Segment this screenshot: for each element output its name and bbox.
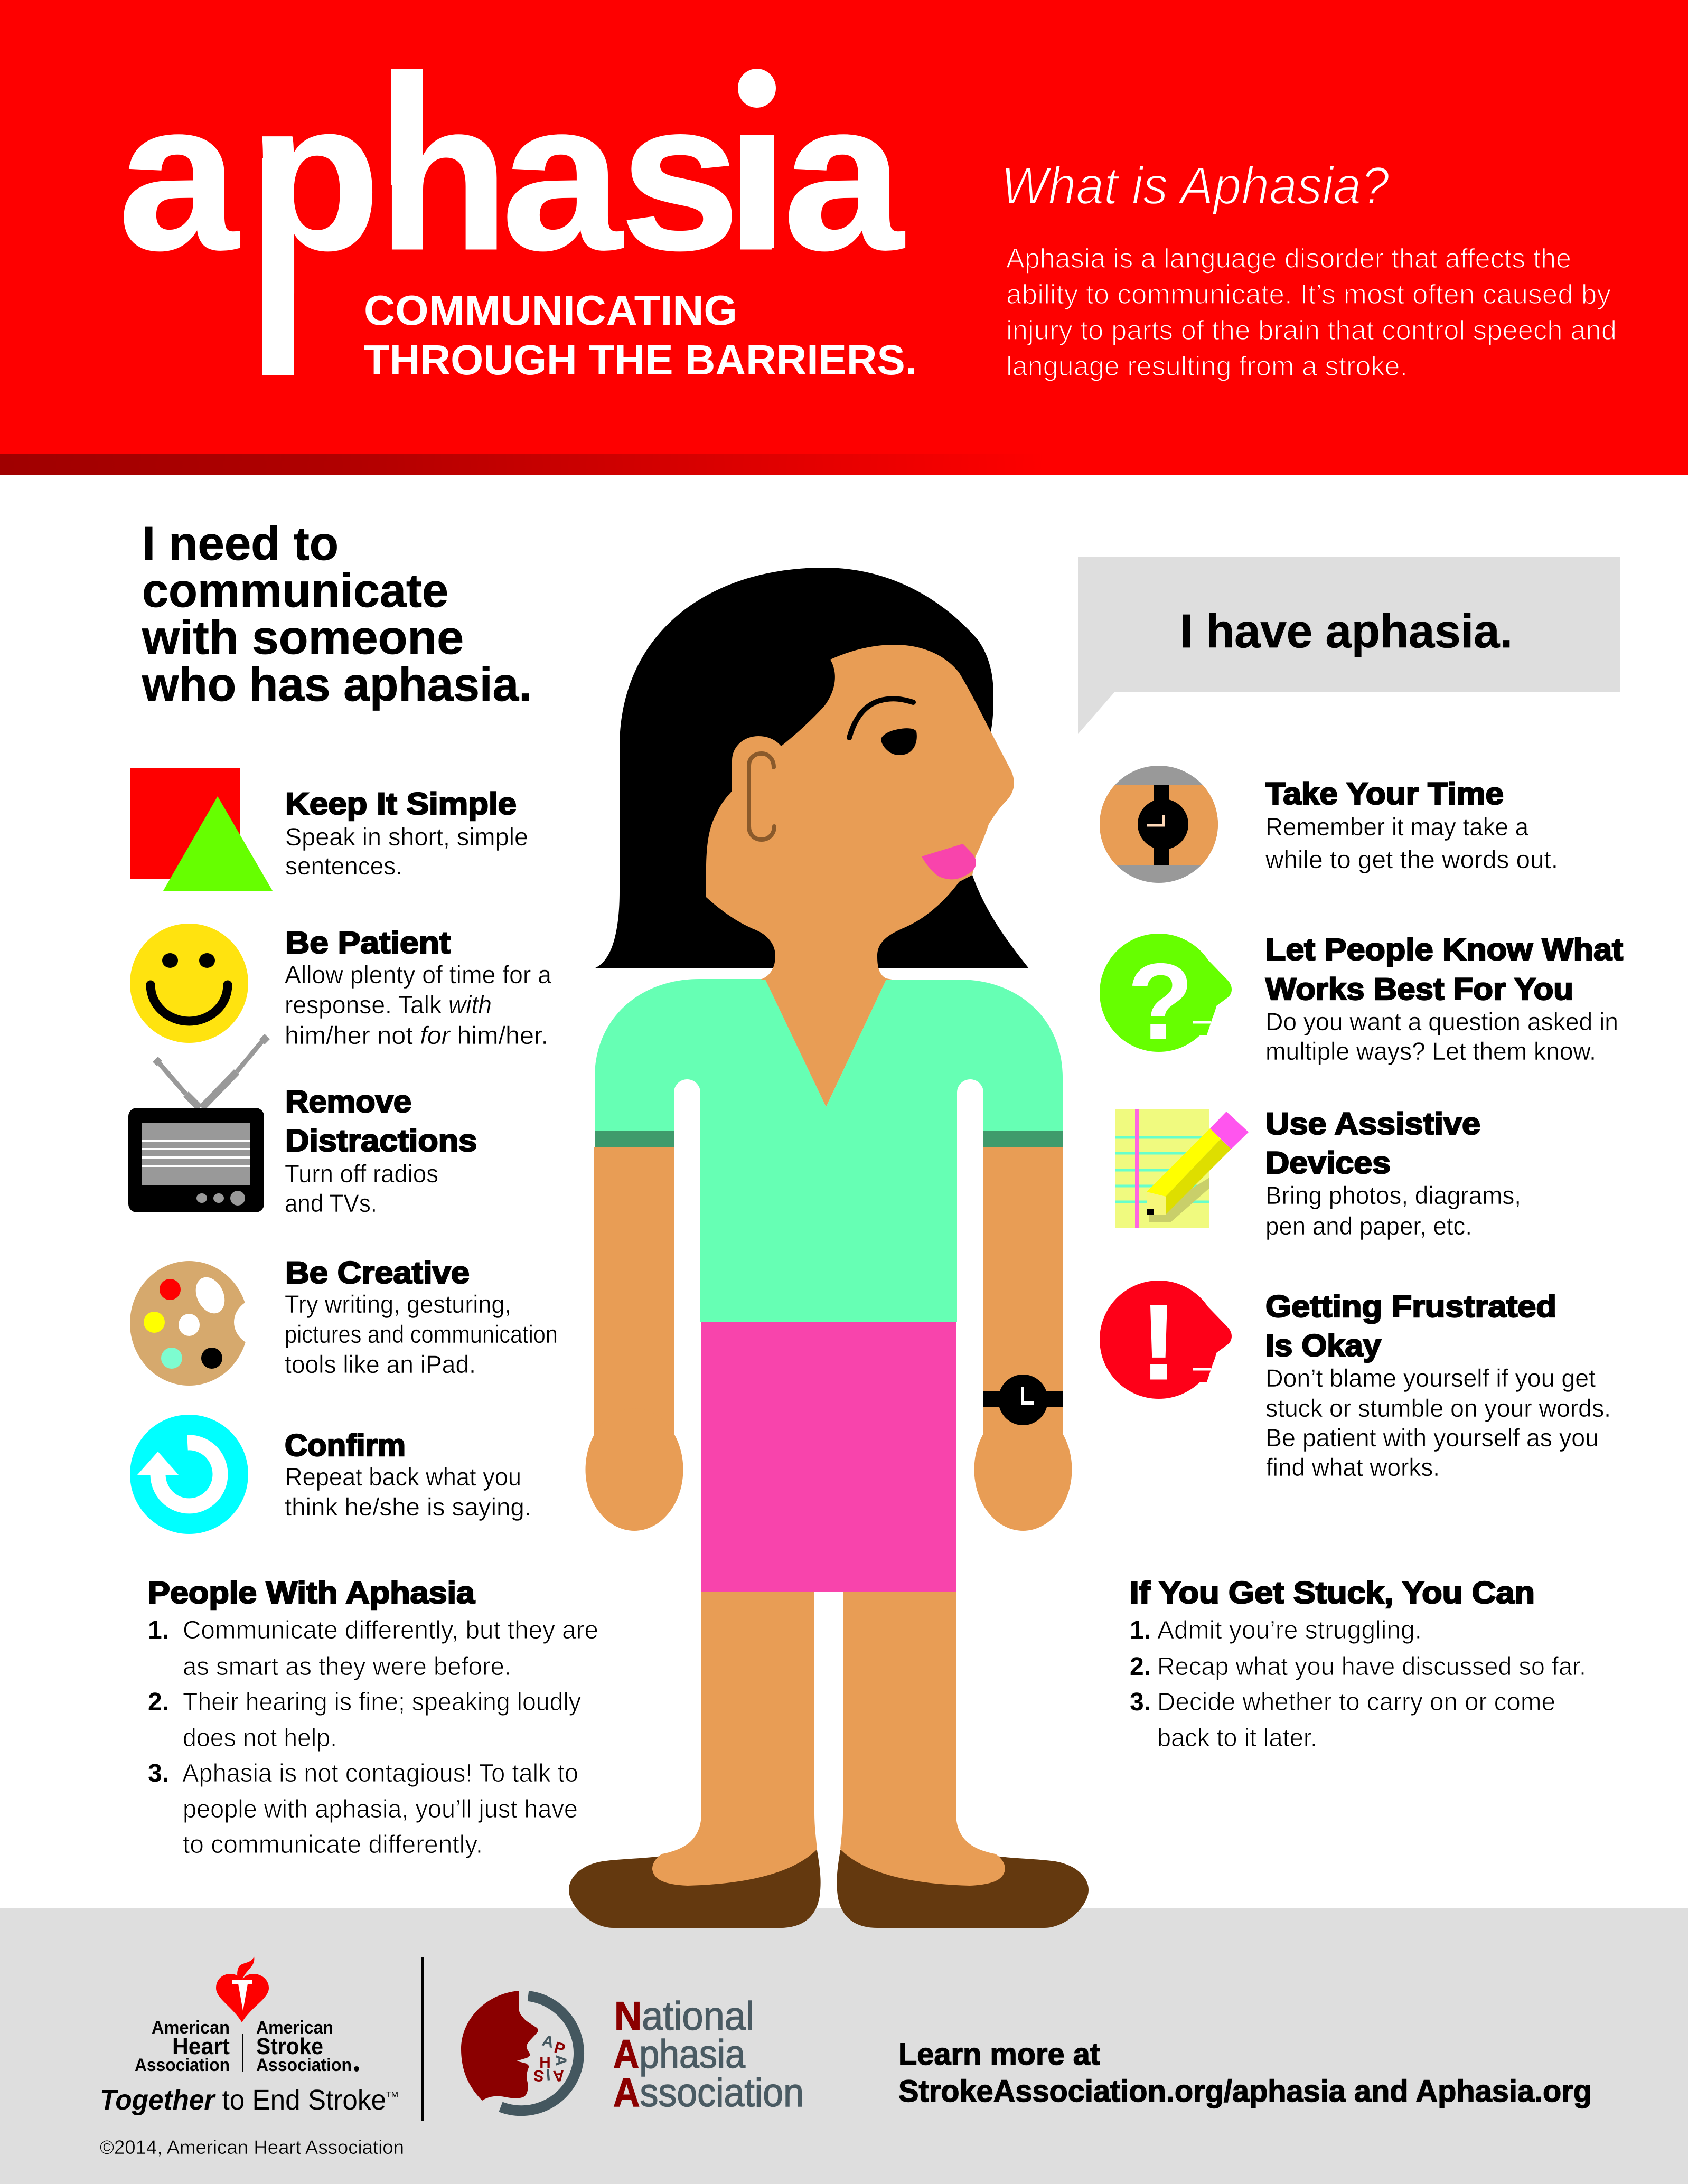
text block: definition: Aphasia is a language disorder that affects the <box>1006 243 1571 274</box>
icon: television <box>128 1037 267 1212</box>
skirt <box>701 1322 956 1592</box>
panel: tip getting frustrated <box>1100 1281 1611 1481</box>
text: getting frustrated <box>1265 1289 1611 1481</box>
sleeve cuffs <box>595 1131 1063 1147</box>
text: getting frustrated: Is Okay <box>1265 1329 1381 1363</box>
text: organisation name <box>613 1994 804 2115</box>
text: keep it simple: sentences. <box>285 852 402 880</box>
face and neck <box>706 645 1014 1107</box>
list: if you get stuck: 1. <box>1130 1616 1151 1644</box>
text: association names: Association <box>256 2055 352 2075</box>
text: keep it simple: Keep It Simple <box>285 787 517 821</box>
list: people with aphasia: people with aphasia, you’ll just have <box>183 1795 578 1823</box>
text: take your time <box>1265 777 1558 873</box>
icon: notepad and pencil <box>1115 1109 1249 1228</box>
text: confirm: Confirm <box>285 1428 406 1463</box>
text block: definition <box>1006 243 1617 382</box>
icon: exclamation head: ! <box>1141 1284 1176 1401</box>
list: people with aphasia: 1. <box>148 1616 169 1644</box>
text: keep it simple <box>285 787 528 880</box>
logo: American Heart and Stroke Association <box>100 1956 386 2116</box>
icon: exclamation head <box>1100 1281 1232 1401</box>
text: use assistive devices: Use Assistive <box>1265 1107 1480 1141</box>
text: confirm <box>285 1428 531 1521</box>
list: if you get stuck: back to it later. <box>1157 1724 1317 1752</box>
ear <box>749 754 774 840</box>
hair <box>594 568 1029 968</box>
right foot and shoe <box>837 1813 1089 1928</box>
text: let people know <box>1265 933 1623 1065</box>
icon: smiley <box>130 924 248 1043</box>
text: getting frustrated: Be patient with yourself as you <box>1265 1424 1599 1452</box>
heading: if you get stuck: If You Get Stuck, You Can <box>1130 1576 1535 1610</box>
icon: watch <box>1099 766 1219 883</box>
panel: if you get stuck <box>1130 1576 1586 1752</box>
heading: I need to communicate <box>142 517 532 711</box>
icon: face profile and ring: P <box>552 2039 567 2058</box>
icon: face profile and ring: H <box>539 2054 551 2072</box>
text: organisation name: Aphasia <box>613 2032 746 2077</box>
text: keep it simple: Speak in short, simple <box>285 823 528 851</box>
text: getting frustrated: find what works. <box>1266 1453 1440 1481</box>
icon: heart and torch <box>216 1956 269 2022</box>
text block: definition: language resulting from a stroke. <box>1006 351 1408 382</box>
text: organisation name: National <box>614 1994 754 2039</box>
text: learn more <box>898 2037 1592 2108</box>
text: be patient: Be Patient <box>285 926 451 960</box>
list: people with aphasia: to communicate differently. <box>183 1831 483 1859</box>
panel: tip be patient <box>130 924 552 1049</box>
text: let people know: Works Best For You <box>1265 972 1573 1006</box>
text: be creative <box>285 1256 558 1378</box>
text block: definition: injury to parts of the brain that control speech and <box>1006 315 1617 346</box>
list: people with aphasia: does not help. <box>183 1724 337 1752</box>
panel: tip keep it simple <box>130 768 528 891</box>
text: take your time: Take Your Time <box>1265 777 1504 811</box>
text: use assistive devices: pen and paper, etc. <box>1265 1212 1472 1240</box>
subtitle <box>364 287 917 383</box>
text: be creative: pictures and communication <box>285 1320 558 1348</box>
text: getting frustrated: stuck or stumble on your words. <box>1265 1394 1611 1422</box>
icon: palette <box>130 1261 294 1386</box>
text: be creative: Be Creative <box>285 1256 470 1290</box>
text: association names: Stroke <box>256 2034 323 2059</box>
speech bubble: I have aphasia <box>1078 557 1620 734</box>
text: use assistive devices: Bring photos, diagrams, <box>1265 1181 1521 1209</box>
icon: face profile and ring <box>461 1991 579 2111</box>
text: be patient: him/her not for him/her. <box>285 1021 548 1049</box>
icon: face profile and ring: I <box>545 2066 551 2083</box>
heading: I need to communicate: with someone <box>142 611 464 664</box>
text: remove distractions: Remove <box>285 1085 411 1119</box>
text: getting frustrated: Getting Frustrated <box>1265 1289 1556 1324</box>
text: be patient <box>285 926 552 1049</box>
heading: I need to communicate: communicate <box>142 564 448 617</box>
panel: tip let people know <box>1100 933 1623 1065</box>
wristwatch <box>983 1375 1063 1425</box>
text: be creative: Try writing, gesturing, <box>285 1290 511 1318</box>
speech bubble: I have aphasia: I have aphasia. <box>1180 605 1513 658</box>
icon: face profile and ring: S <box>533 2066 545 2085</box>
left arm and hand <box>585 1147 683 1531</box>
text: remove distractions: Turn off radios <box>285 1160 438 1188</box>
legs <box>701 1592 956 1814</box>
list: people with aphasia: Communicate differently, but they are <box>183 1616 598 1644</box>
text: be patient: Allow plenty of time for a <box>285 961 552 989</box>
tagline: together to end stroke: Together to End Stroke <box>100 2084 386 2116</box>
heading: people with aphasia: People With Aphasia <box>148 1576 475 1610</box>
text: confirm: think he/she is saying. <box>285 1493 531 1521</box>
icon: question head: ? <box>1127 941 1194 1062</box>
list: if you get stuck: 3. <box>1130 1688 1151 1716</box>
eyebrow <box>849 699 913 738</box>
list: people with aphasia: Aphasia is not contagious! To talk to <box>182 1759 578 1787</box>
text block: definition: ability to communicate. It’s most often caused by <box>1006 279 1611 310</box>
icon: question head <box>1100 934 1232 1062</box>
figure: woman with aphasia <box>569 568 1089 1928</box>
heading: I need to communicate: who has aphasia. <box>142 658 532 711</box>
list: if you get stuck: Decide whether to carry on or come <box>1157 1688 1555 1716</box>
panel: people with aphasia <box>148 1576 598 1859</box>
divider between logos <box>421 1957 424 2121</box>
text: learn more: Learn more at <box>898 2037 1100 2072</box>
copyright: ©2014, American Heart Association <box>100 2136 404 2158</box>
text: getting frustrated: Don’t blame yourself if you get <box>1265 1364 1596 1392</box>
subtitle: THROUGH THE BARRIERS. <box>364 336 917 383</box>
icon: face profile and ring: A <box>540 2032 556 2051</box>
icon: circular arrow <box>130 1415 248 1534</box>
lips <box>922 844 976 879</box>
icon: face profile and ring: A <box>552 2066 565 2085</box>
text: be creative: tools like an iPad. <box>285 1350 476 1378</box>
text: organisation name: Association <box>613 2070 804 2115</box>
text: let people know: multiple ways? Let them know. <box>1265 1037 1596 1065</box>
shirt <box>595 979 1063 1322</box>
left foot and shoe <box>569 1813 821 1928</box>
panel: tip be creative <box>130 1256 558 1386</box>
panel: red header <box>0 0 1688 475</box>
list: people with aphasia: 2. <box>148 1688 169 1716</box>
panel: tip remove distractions <box>128 1037 477 1217</box>
text: association names: American <box>256 2018 333 2038</box>
panel: tip confirm <box>130 1415 531 1534</box>
text: association names <box>135 2018 359 2075</box>
text: remove distractions: Distractions <box>285 1124 477 1158</box>
text: confirm: Repeat back what you <box>285 1463 521 1491</box>
trademark mark: TM <box>386 2091 398 2100</box>
list: people with aphasia: 3. <box>148 1759 169 1787</box>
heading: What is Aphasia?: What is Aphasia? <box>1001 156 1389 215</box>
heading: I need to communicate: I need to <box>142 517 339 570</box>
text: association names: Heart <box>172 2034 230 2059</box>
list: people with aphasia: as smart as they were before. <box>183 1653 511 1681</box>
panel: grey footer <box>0 1908 1688 2184</box>
text: learn more: StrokeAssociation.org/aphasia and Aphasia.org <box>898 2074 1592 2108</box>
list: if you get stuck: Admit you’re struggling. <box>1157 1616 1422 1644</box>
subtitle: COMMUNICATING <box>364 287 737 334</box>
panel: tip take your time <box>1099 766 1558 883</box>
text: take your time: while to get the words out. <box>1265 845 1558 873</box>
logo: National Aphasia Association <box>461 1991 804 2115</box>
panel: tip use assistive devices <box>1115 1107 1521 1240</box>
text: use assistive devices: Devices <box>1265 1146 1391 1180</box>
list: people with aphasia: Their hearing is fine; speaking loudly <box>183 1688 581 1716</box>
list: people with aphasia <box>148 1616 598 1859</box>
text: association names: Association <box>135 2055 230 2075</box>
list: if you get stuck <box>1130 1616 1586 1752</box>
list: if you get stuck: Recap what you have discussed so far. <box>1157 1653 1586 1681</box>
text: remove distractions: and TVs. <box>285 1189 377 1217</box>
right arm and hand <box>974 1147 1072 1531</box>
text: use assistive devices <box>1265 1107 1521 1240</box>
icon: square and triangle <box>130 768 273 891</box>
eye <box>881 728 917 755</box>
list: if you get stuck: 2. <box>1130 1653 1151 1681</box>
title: aphasia: aphasia <box>118 58 905 295</box>
text: take your time: Remember it may take a <box>1265 813 1529 841</box>
text: remove distractions <box>285 1085 477 1217</box>
text: association names: American <box>152 2018 230 2038</box>
text: let people know: Do you want a question asked in <box>1265 1008 1618 1035</box>
text: be patient: response. Talk with <box>285 991 492 1019</box>
text: let people know: Let People Know What <box>1265 933 1623 967</box>
icon: face profile and ring: A <box>552 2055 569 2066</box>
